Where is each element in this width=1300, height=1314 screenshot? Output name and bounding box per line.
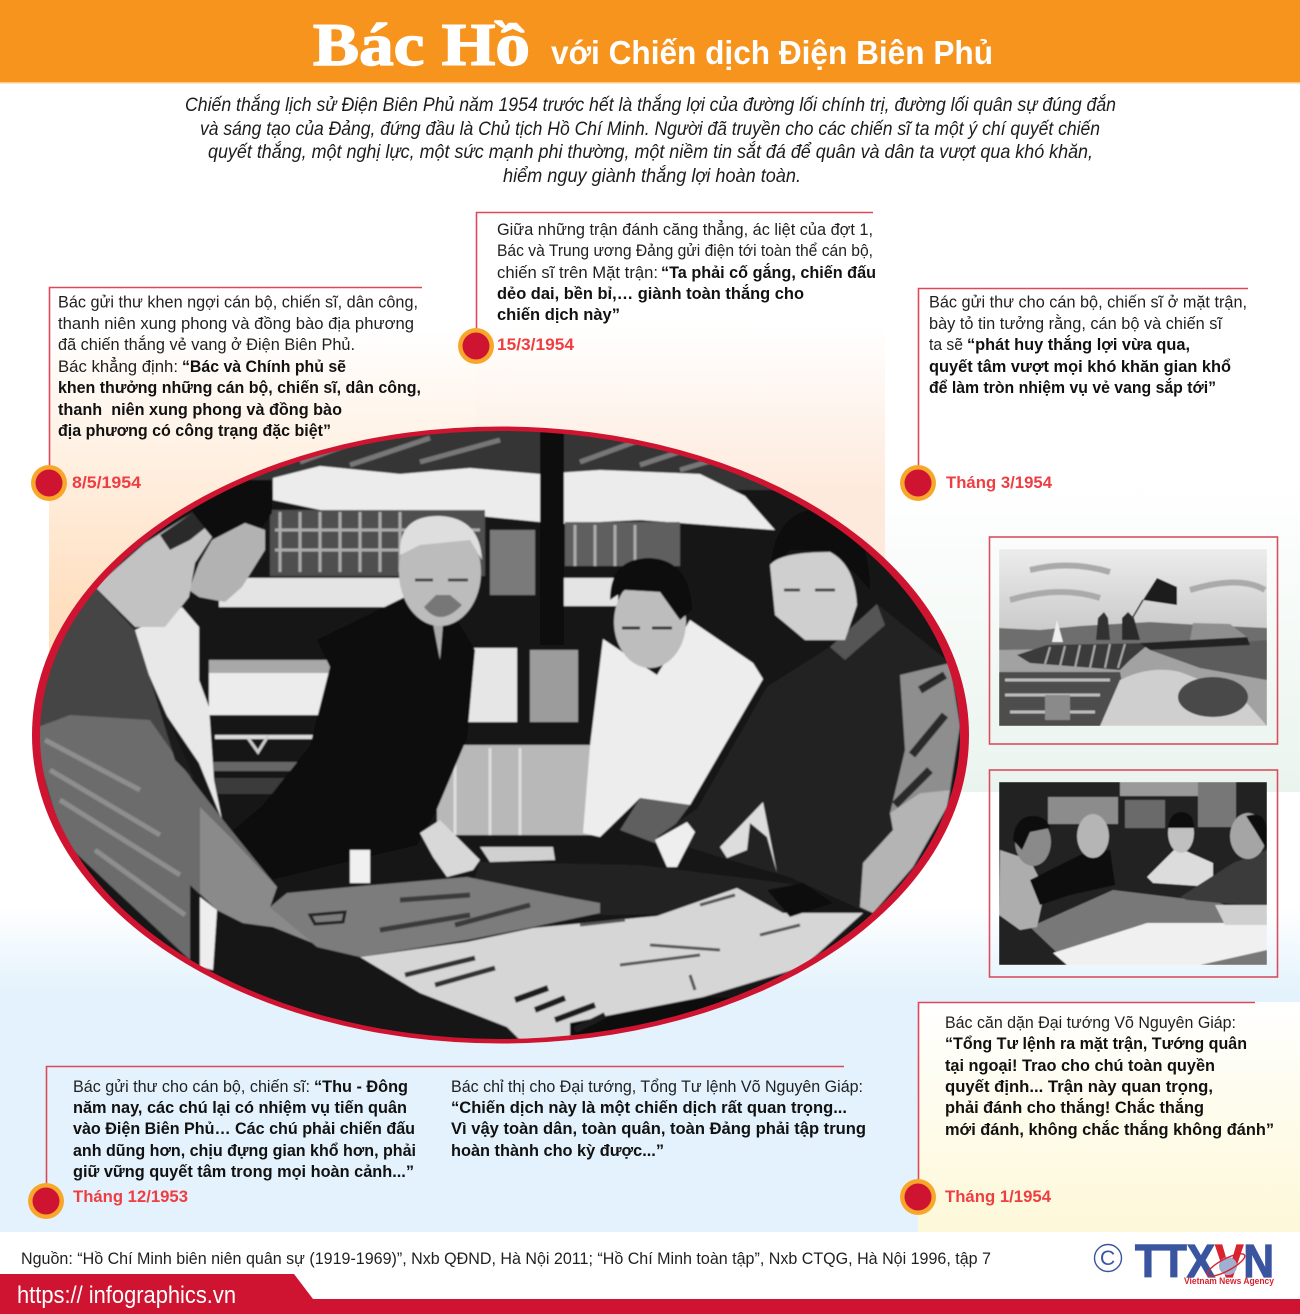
man 4 hand and gap — [655, 822, 695, 867]
text: Tháng 3/1954 message: ta sẽ — [929, 335, 963, 354]
text: 8/5/1954 message: “Bác và Chính phủ sẽ — [182, 357, 346, 376]
cup — [350, 850, 370, 883]
man 2 shirt — [135, 607, 222, 820]
Ho hand — [420, 820, 480, 877]
footer red band — [0, 1274, 1300, 1314]
text: Tháng 12/1953 message: “Thu - Đông — [314, 1077, 408, 1096]
text: Tháng 1/1954 message: “Tổng Tư lệnh ra mặt trận, Tướng quân — [945, 1034, 1247, 1053]
intro text: quyết thắng, một nghị lực, một sức mạnh phi thường, một niềm tin sắt đá để quân và dân ta vượt qua khó khăn, — [208, 140, 1093, 163]
photo: leaders around the table — [999, 782, 1267, 965]
text: Tháng 3/1954 message: bày tỏ tin tưởng rằng, cán bộ và chiến sĩ — [929, 314, 1223, 333]
text: 15/3/1954 message: Bác và Trung ương Đảng gửi điện tới toàn thể cán bộ, — [497, 241, 873, 260]
text: Tháng 3/1954 message: quyết tâm vượt mọi khó khăn gian khổ — [929, 357, 1231, 376]
man 4 — [657, 604, 960, 912]
text: 8/5/1954 message: địa phương có công trạng đặc biệt” — [58, 421, 331, 440]
frame: flag over bunker photo — [990, 537, 1278, 744]
panel: Tháng 12/1953 — [28, 1066, 844, 1219]
text: 8/5/1954 message: khen thưởng những cán bộ, chiến sĩ, dân công, — [58, 378, 421, 397]
text: 8/5/1954 message: Bác khẳng định: — [58, 357, 178, 376]
man 2 hair and face — [192, 480, 272, 543]
panel: 15/3/1954 — [458, 212, 876, 364]
text: Tháng 1/1954 message: mới đánh, không chắc thắng không đánh” — [945, 1120, 1274, 1139]
text: Tháng 1/1954 message — [945, 1013, 1274, 1139]
logo: TTXVN: C — [1100, 1247, 1115, 1270]
text: Tháng 1/1954 message: tại ngoại! Trao cho chú toàn quyền — [945, 1056, 1215, 1075]
text: order to General Giáp — [451, 1077, 866, 1160]
text: order to General Giáp: “Chiến dịch này là một chiến dịch rất quan trọng... — [451, 1098, 847, 1117]
icon: timeline dot — [900, 1179, 936, 1215]
text: 15/3/1954 message: Giữa những trận đánh căng thẳng, ác liệt của đợt 1, — [497, 220, 873, 239]
text: Tháng 12/1953 message — [73, 1077, 416, 1181]
logo: TTXVN: TTXVN — [1135, 1235, 1274, 1287]
text: Tháng 12/1953 message: năm nay, các chú lại có nhiệm vụ tiến quân — [73, 1098, 407, 1117]
photo: Bac Ho and commanders at the map — [30, 420, 970, 1050]
icon: timeline dot — [900, 465, 936, 501]
text: Tháng 3/1954 message: để làm tròn nhiệm vụ vẻ vang sắp tới” — [929, 378, 1216, 397]
title: Bác Hồ — [313, 12, 530, 78]
date: 15/3/1954 — [497, 335, 575, 354]
man 1 body — [40, 590, 270, 876]
panel: 8/5/1954 — [31, 288, 422, 501]
intro text: hiểm nguy giành thắng lợi hoàn toàn. — [503, 164, 801, 187]
intro text: và sáng tạo của Đảng, đứng đầu là Chủ tịch Hồ Chí Minh. Người đã truyền cho các chiến sĩ ta một ý chí quyết chiến — [200, 118, 1100, 140]
Ho suit — [230, 596, 475, 880]
man 3 — [583, 620, 763, 837]
table dark — [467, 862, 800, 915]
text: Tháng 12/1953 message: giữ vững quyết tâm trong mọi hoàn cảnh...” — [73, 1162, 414, 1181]
man 1 face — [95, 513, 212, 627]
date: Tháng 1/1954 — [945, 1187, 1052, 1206]
text: 8/5/1954 message — [58, 292, 421, 440]
text: 15/3/1954 message: chiến sĩ trên Mặt trận: — [497, 263, 658, 282]
date: Tháng 12/1953 — [73, 1187, 188, 1206]
icon: timeline dot — [28, 1183, 64, 1219]
subtitle: với Chiến dịch Điện Biên Phủ — [551, 34, 993, 71]
date: 8/5/1954 — [72, 473, 142, 492]
header band — [0, 0, 1300, 84]
text: Tháng 3/1954 message — [929, 292, 1247, 397]
text: order to General Giáp: Vì vậy toàn dân, toàn quân, toàn Đảng phải tập trung — [451, 1119, 866, 1138]
panel: Tháng 3/1954 — [900, 288, 1248, 501]
text: order to General Giáp: hoàn thành cho kỳ được...” — [451, 1141, 664, 1160]
text: Tháng 12/1953 message: vào Điện Biên Phủ… Các chú phải chiến đấu — [73, 1119, 415, 1138]
Ho head — [398, 540, 482, 628]
text: Tháng 12/1953 message: Bác gửi thư cho cán bộ, chiến sĩ: — [73, 1077, 310, 1096]
map mid — [270, 877, 600, 957]
text: Tháng 3/1954 message: Bác gửi thư cho cán bộ, chiến sĩ ở mặt trận, — [929, 292, 1247, 312]
panel: Tháng 1/1954 — [900, 1002, 1300, 1232]
intro text — [185, 93, 1116, 187]
text: Tháng 1/1954 message: phải đánh cho thắng! Chắc thắng — [945, 1098, 1204, 1117]
footer url: https:// infographics.vn — [17, 1282, 236, 1309]
text: 15/3/1954 message: dẻo dai, bền bỉ,… giành toàn thắng cho — [497, 284, 804, 303]
icon: timeline dot — [31, 465, 67, 501]
text: 15/3/1954 message: chiến dịch này” — [497, 305, 620, 324]
text: 8/5/1954 message: đã chiến thắng vẻ vang ở Điện Biên Phủ. — [58, 335, 355, 354]
text: Tháng 3/1954 message: “phát huy thắng lợi vừa qua, — [967, 335, 1190, 354]
frame: meeting photo — [990, 770, 1278, 977]
intro text: Chiến thắng lịch sử Điện Biên Phủ năm 1954 trước hết là thắng lợi của đường lối chính trị, đường lối quân sự đúng đắn — [185, 93, 1116, 116]
text: 8/5/1954 message: Bác gửi thư khen ngợi cán bộ, chiến sĩ, dân công, — [58, 292, 418, 312]
icon: timeline dot — [458, 328, 494, 364]
text: Tháng 1/1954 message: quyết định... Trận này quan trọng, — [945, 1077, 1213, 1096]
text: Tháng 12/1953 message: anh dũng hơn, chịu đựng gian khổ hơn, phải — [73, 1141, 416, 1160]
text: 15/3/1954 message — [497, 220, 876, 324]
logo: TTXVN: Vietnam News Agency — [1184, 1276, 1274, 1286]
text: Tháng 1/1954 message: Bác căn dặn Đại tướng Võ Nguyên Giáp: — [945, 1013, 1236, 1032]
source note: Nguồn: “Hồ Chí Minh biên niên quân sự (1919-1969)”, Nxb QĐND, Hà Nội 2011; “Hồ Chí Minh toàn tập”, Nxb CTQG, Hà Nội 1996, tập 7 — [21, 1249, 991, 1268]
text: 8/5/1954 message: thanh niên xung phong và đồng bào địa phương — [58, 314, 414, 333]
map light — [360, 888, 863, 1040]
photo: victory flag at Dien Bien Phu — [999, 549, 1267, 726]
text: order to General Giáp: Bác chỉ thị cho Đại tướng, Tổng Tư lệnh Võ Nguyên Giáp: — [451, 1077, 863, 1096]
date: Tháng 3/1954 — [946, 473, 1053, 492]
text: 15/3/1954 message: “Ta phải cố gắng, chiến đấu — [661, 263, 876, 282]
text: 8/5/1954 message: thanh niên xung phong và đồng bào — [58, 400, 342, 419]
